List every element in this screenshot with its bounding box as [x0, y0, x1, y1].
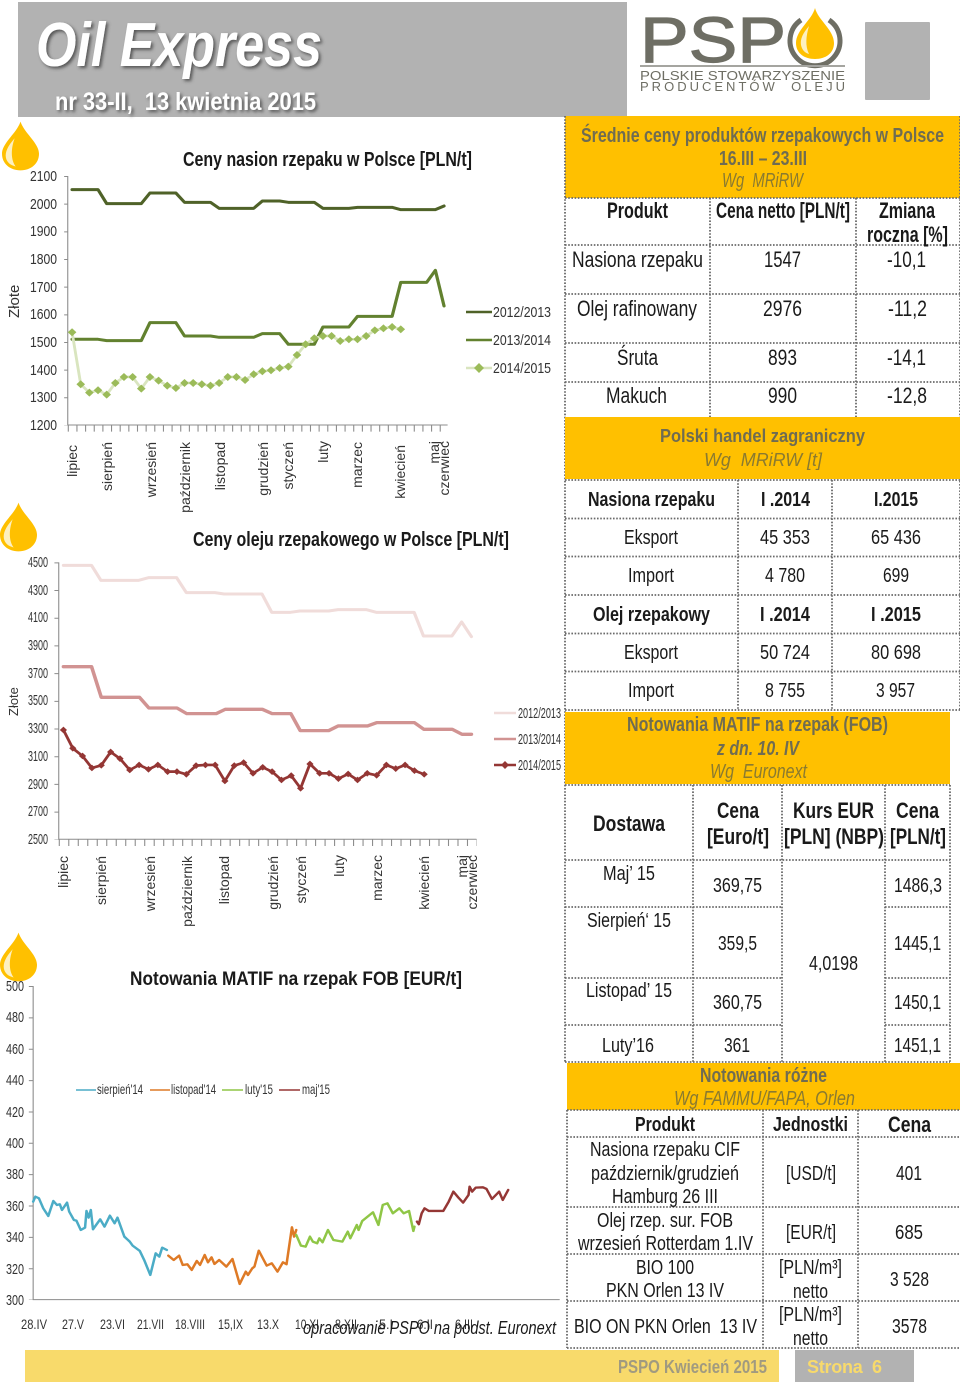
table text [586, 798, 946, 1057]
plot lines [66, 176, 448, 428]
logo: PSPO: POLSKIE STOWARZYSZENIE [640, 68, 845, 83]
panel: foreign trade [565, 417, 960, 710]
x axis labels: 10.XI [295, 1316, 319, 1332]
icon: oil drop 2 [0, 503, 37, 551]
x axis labels: 5.I [379, 1316, 393, 1332]
heading: Wg MRiRW [t] [704, 450, 823, 470]
month labels: sierpień [93, 856, 109, 905]
table text: Zmiana [879, 198, 936, 223]
month labels: sierpień [99, 442, 115, 491]
table text: [PLN/t] [890, 824, 946, 849]
month labels [64, 441, 452, 513]
y axis labels: 1900 [30, 223, 57, 240]
legend: 2014/2015 [493, 360, 551, 377]
table text: -14,1 [887, 345, 926, 370]
chart: rapeseed prices: Złote [6, 285, 23, 318]
month labels: czerwiec [436, 441, 452, 495]
y axis labels [6, 978, 24, 1309]
table text: 1486,3 [894, 875, 942, 897]
plot lines [57, 562, 477, 843]
table text: 1450,1 [894, 992, 941, 1014]
month labels: październik [179, 855, 195, 927]
heading [674, 1065, 855, 1110]
table text: 2976 [763, 296, 802, 321]
table text: 893 [768, 345, 797, 370]
y axis labels: 3900 [28, 637, 48, 654]
source note: opracowanie PSPO na podst. Euronext [303, 1318, 557, 1338]
month labels: listopad [212, 442, 228, 490]
table text: -12,8 [887, 383, 927, 408]
table text: Import [628, 565, 674, 587]
table text: Nasiona rzepaku [588, 489, 715, 511]
table text: [PLN/m³] [779, 1304, 842, 1326]
y axis labels: 400 [6, 1135, 24, 1152]
chart: rapeseed oil prices [6, 529, 561, 927]
y axis labels: 480 [6, 1009, 24, 1026]
y axis labels: 500 [6, 978, 24, 995]
table text: Olej rafinowany [577, 296, 697, 321]
table text: 8 755 [765, 680, 805, 702]
y axis labels: 1200 [30, 417, 57, 434]
table text: październik/grudzień [591, 1163, 739, 1185]
table text: 401 [896, 1163, 922, 1185]
month labels [55, 855, 480, 927]
table text: 699 [883, 565, 909, 587]
table text: 685 [895, 1222, 923, 1244]
month labels: grudzień [255, 442, 271, 496]
logo: PSPO: PSP [640, 4, 786, 76]
y axis labels [28, 554, 48, 848]
legend: maj'15 [302, 1081, 330, 1097]
heading: Wg Euronext [710, 761, 808, 783]
table text: Cena [717, 798, 760, 823]
legend: luty'15 [245, 1081, 273, 1097]
heading: 16.III – 23.III [719, 148, 807, 170]
chart title: Ceny nasion rzepaku w Polsce [PLN/t] [183, 149, 472, 171]
x axis labels [21, 1316, 473, 1332]
table text: Śruta [617, 345, 659, 370]
icon: oil drop 1 [2, 122, 39, 170]
x axis labels: 23.VI [100, 1316, 125, 1332]
table text: Olej rzep. sur. FOB [597, 1210, 733, 1232]
legend [494, 705, 561, 774]
heading [660, 426, 865, 470]
legend [76, 1081, 330, 1097]
table text: BIO 100 [636, 1257, 694, 1279]
legend: 2012/2013 [493, 304, 551, 321]
table text [572, 198, 948, 408]
table text: -11,2 [888, 296, 927, 321]
table text: Cena netto [PLN/t] [716, 198, 850, 223]
table text: I .2015 [871, 604, 921, 626]
y axis labels: 420 [6, 1104, 24, 1121]
table text: Olej rzepakowy [593, 604, 711, 626]
chart: rapeseed oil prices: Złote [6, 687, 21, 716]
icon: oil drop 3 [0, 933, 37, 981]
chart title: Ceny oleju rzepakowego w Polsce [PLN/t] [193, 529, 509, 551]
month labels: marzec [349, 442, 365, 488]
table text: [EUR/t] [786, 1222, 836, 1244]
grey square [865, 22, 930, 100]
table text: netto [793, 1281, 828, 1303]
month labels: luty [331, 855, 347, 877]
table text: 1445,1 [894, 933, 941, 955]
chart title: Notowania MATIF na rzepak FOB [EUR/t] [130, 969, 462, 990]
table text: 65 436 [871, 527, 921, 549]
table text: 4 780 [765, 565, 805, 587]
legend: listopad'14 [171, 1081, 216, 1097]
table text: 80 698 [871, 642, 921, 664]
table text: Hamburg 26 III [612, 1186, 718, 1208]
month labels: wrzesień [143, 442, 159, 498]
logo: PSPO: PRODUCENTÓW OLEJU [640, 79, 845, 94]
x axis labels: 15,IX [218, 1316, 243, 1332]
y axis labels: 4100 [28, 609, 48, 626]
table text: 4,0198 [809, 953, 858, 975]
month labels: lipiec [55, 856, 71, 888]
table text: 990 [768, 383, 797, 408]
issue date: nr 33-II, 13 kwietnia 2015 [55, 88, 316, 116]
heading [581, 123, 944, 192]
legend: 2013/2014 [518, 731, 561, 748]
y axis labels: 440 [6, 1072, 24, 1089]
table text: 45 353 [760, 527, 810, 549]
heading: Notowania różne [700, 1065, 827, 1087]
y axis labels: 340 [6, 1229, 24, 1246]
y axis labels: 1800 [30, 251, 57, 268]
chart: MATIF rapeseed quotes [6, 969, 560, 1338]
y axis labels: 1700 [30, 279, 57, 296]
table text: 360,75 [713, 992, 762, 1014]
table text: Nasiona rzepaku CIF [590, 1139, 740, 1161]
panel: average prices [565, 116, 960, 1062]
month labels: lipiec [64, 445, 80, 477]
table text: I.2015 [874, 489, 918, 511]
table text: wrzesień Rotterdam 1.IV [577, 1233, 754, 1255]
table text: netto [793, 1328, 828, 1350]
footer date: PSPO Kwiecień 2015 [618, 1357, 767, 1377]
month labels: styczeń [280, 442, 296, 489]
table text: [Euro/t] [707, 824, 769, 849]
month labels: kwiecień [416, 856, 432, 910]
y axis labels: 380 [6, 1166, 24, 1183]
heading: Polski handel zagraniczny [660, 426, 865, 446]
table text: Makuch [606, 383, 667, 408]
y axis labels: 3700 [28, 665, 48, 682]
table text: 359,5 [718, 933, 757, 955]
table text: 1547 [764, 247, 801, 272]
table text: -10,1 [887, 247, 926, 272]
y axis labels: 460 [6, 1041, 24, 1058]
y axis labels: 1300 [30, 389, 57, 406]
heading: Notowania MATIF na rzepak (FOB) [627, 714, 888, 736]
heading: Wg MRiRW [722, 170, 805, 192]
month labels: listopad [216, 856, 232, 904]
table text: Listopad’ 15 [586, 980, 672, 1002]
month labels: czerwiec [464, 855, 480, 909]
table text: Produkt [635, 1114, 695, 1136]
table text: [PLN/m³] [779, 1257, 842, 1279]
table text: Cena [888, 1112, 932, 1137]
month labels: marzec [369, 855, 385, 901]
table text: Eksport [624, 642, 678, 664]
table text: Import [628, 680, 674, 702]
month labels: kwiecień [392, 445, 408, 499]
y axis labels: 2100 [30, 168, 57, 185]
table text: Maj’ 15 [603, 863, 655, 885]
table text: BIO ON PKN Orlen 13 IV [574, 1316, 758, 1338]
y axis labels: 3500 [28, 692, 48, 709]
table text: 3 957 [876, 680, 915, 702]
x axis labels: 13.X [257, 1316, 279, 1332]
logo: PSPO [640, 4, 845, 94]
legend: sierpień'14 [97, 1081, 143, 1097]
table text: 1451,1 [894, 1035, 941, 1057]
header banner [18, 2, 627, 117]
plot lines [31, 986, 560, 1300]
table text: 361 [724, 1035, 750, 1057]
y axis labels: 1400 [30, 362, 57, 379]
x axis labels: 28.IV [21, 1316, 48, 1332]
table text: PKN Orlen 13 IV [606, 1280, 725, 1302]
footer [25, 1350, 914, 1382]
table text: Dostawa [593, 811, 666, 836]
x axis labels: 27.V [62, 1316, 84, 1332]
month labels: maj [426, 441, 442, 464]
x axis labels: 6.III [455, 1316, 473, 1332]
title: Oil Express: Oil Express [36, 11, 322, 80]
month labels: maj [454, 855, 470, 878]
y axis labels: 3100 [28, 748, 48, 765]
y axis labels: 4500 [28, 554, 48, 571]
table text: I .2014 [760, 604, 811, 626]
y axis labels: 2700 [28, 803, 48, 820]
chart: rapeseed prices [6, 149, 551, 513]
y axis labels: 320 [6, 1261, 24, 1278]
month labels: wrzesień [142, 856, 158, 912]
month labels: luty [315, 441, 331, 463]
table text: Sierpień‘ 15 [587, 910, 671, 932]
heading: Wg FAMMU/FAPA, Orlen [674, 1088, 855, 1110]
legend: 2012/2013 [518, 705, 561, 722]
table text [588, 489, 921, 702]
panel: MATIF quotes [565, 712, 950, 1062]
y axis labels: 4300 [28, 582, 48, 599]
table text: [USD/t] [786, 1163, 836, 1185]
month labels: październik [177, 441, 193, 513]
table text: 50 724 [760, 642, 810, 664]
table text: I .2014 [761, 489, 811, 511]
table text [574, 1112, 932, 1350]
y axis labels: 300 [6, 1292, 24, 1309]
table text: [PLN] (NBP) [784, 824, 884, 849]
x axis labels: 8.XII [335, 1316, 357, 1332]
table text: 369,75 [713, 875, 762, 897]
y axis labels: 1500 [30, 334, 57, 351]
table text: 3578 [892, 1316, 927, 1338]
y axis labels: 2900 [28, 776, 48, 793]
x axis labels: 6.II [417, 1316, 433, 1332]
table text: Cena [896, 798, 940, 823]
table text: Kurs EUR [793, 798, 874, 823]
table text: 3 528 [890, 1269, 929, 1291]
legend: 2014/2015 [518, 757, 561, 774]
table text: Nasiona rzepaku [572, 247, 703, 272]
heading: z dn. 10. IV [716, 738, 800, 760]
heading [627, 714, 888, 783]
month labels: grudzień [265, 856, 281, 910]
y axis labels [30, 168, 57, 434]
y axis labels: 1600 [30, 306, 57, 323]
table text: Eksport [624, 527, 678, 549]
x axis labels: 18.VIII [175, 1316, 205, 1332]
y axis labels: 2000 [30, 196, 57, 213]
y axis labels: 360 [6, 1198, 24, 1215]
page number: Strona 6 [807, 1357, 882, 1377]
panel: other quotes [567, 1063, 960, 1350]
legend: 2013/2014 [493, 332, 551, 349]
table text: Luty’16 [602, 1035, 654, 1057]
y axis labels: 2500 [28, 831, 48, 848]
table text: Produkt [607, 198, 668, 223]
legend [466, 304, 551, 377]
x axis labels: 21.VII [137, 1316, 164, 1332]
table text: Jednostki [773, 1114, 848, 1136]
month labels: styczeń [293, 856, 309, 903]
y axis labels: 3300 [28, 720, 48, 737]
